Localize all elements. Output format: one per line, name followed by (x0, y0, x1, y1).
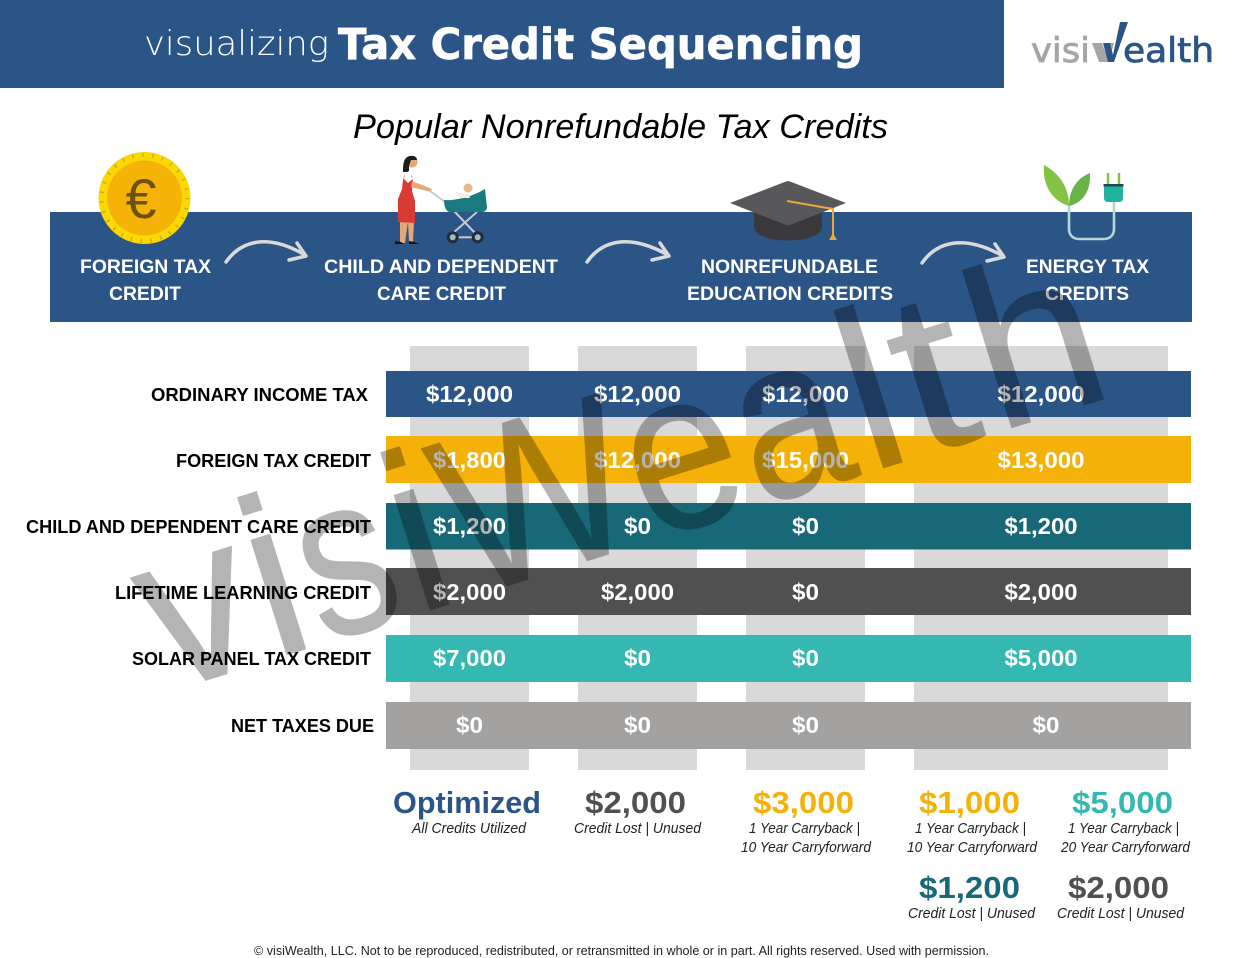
row: net taxes due: NET TAXES DUE (231, 716, 374, 736)
row: net taxes due: $0 (624, 712, 651, 738)
row: ordinary income tax: $12,000 (762, 381, 849, 407)
label: energy tax credits: ENERGY TAX (1026, 257, 1149, 278)
row: solar panel tax credit: $0 (792, 645, 819, 671)
row: solar panel tax credit (132, 635, 1191, 682)
outcome: $1,200 credit lost: $1,200 (919, 870, 1020, 905)
outcome: $1,200 credit lost: Credit Lost | Unused (908, 905, 1036, 922)
row: solar panel tax credit: $5,000 (1004, 645, 1078, 671)
row: child and dependent care credit: $0 (624, 513, 651, 539)
icon: euro coin (98, 152, 190, 244)
watermark: e (588, 312, 771, 588)
row: ordinary income tax (151, 371, 1191, 417)
watermark: h (935, 199, 1132, 479)
label: child and dependent care credit: CHILD AND DEPENDENT (324, 257, 558, 278)
watermark: v (104, 465, 283, 740)
logo: visiWealth: ealth (1123, 31, 1214, 71)
outcome: $2,000 credit lost, solar (1057, 870, 1185, 922)
row: net taxes due (231, 702, 1191, 749)
outcome: $1,000 carryover: 1 Year Carryback | (915, 820, 1026, 837)
row: ordinary income tax: $12,000 (426, 381, 513, 407)
row: net taxes due: $0 (456, 712, 483, 738)
title: Tax Credit Sequencing (338, 20, 863, 70)
row: lifetime learning credit: $2,000 (433, 579, 506, 605)
watermark: W (406, 346, 663, 645)
label: foreign tax credit: FOREIGN TAX (80, 257, 211, 278)
arrow: child care to education (587, 242, 669, 262)
outcome: $5,000 carryover: 1 Year Carryback | (1068, 820, 1179, 837)
row: solar panel tax credit: $0 (624, 645, 651, 671)
row: foreign tax credit: FOREIGN TAX CREDIT (176, 451, 371, 471)
watermark: l (807, 262, 932, 519)
outcome: $1,000 carryover: $1,000 (919, 785, 1020, 820)
watermark: t (858, 240, 1003, 504)
arrow: foreign to child care (226, 242, 306, 262)
outcome: $2,000 credit lost, solar: $2,000 (1068, 870, 1169, 905)
row: ordinary income tax: ORDINARY INCOME TAX (151, 385, 368, 405)
outcome: $3,000 carryover (741, 785, 872, 856)
row: net taxes due: $0 (1032, 712, 1060, 738)
row: lifetime learning credit: $2,000 (601, 579, 674, 605)
row: child and dependent care credit: $1,200 (1004, 513, 1078, 539)
watermark: i (211, 449, 335, 706)
row: solar panel tax credit: $7,000 (433, 645, 506, 671)
row: foreign tax credit: $1,800 (433, 447, 506, 473)
row: lifetime learning credit: $0 (792, 579, 819, 605)
label: nonrefundable education credits (687, 257, 893, 305)
icon: plant and plug (1044, 165, 1124, 239)
label: nonrefundable education credits: NONREFUNDABLE (701, 257, 878, 278)
row: net taxes due: $0 (792, 712, 819, 738)
watermark (104, 199, 1132, 740)
watermark: a (698, 279, 877, 554)
outcome: $3,000 carryover: 10 Year Carryforward (741, 839, 872, 856)
row: foreign tax credit: $13,000 (998, 447, 1084, 473)
row: child and dependent care credit: CHILD AND DEPENDENT CARE CREDIT (26, 517, 371, 537)
outcome: optimized: Optimized (393, 785, 541, 820)
outcome: $2,000 credit lost (574, 785, 702, 837)
outcome: $5,000 carryover (1060, 785, 1191, 856)
label: foreign tax credit (80, 257, 211, 305)
row: solar panel tax credit: SOLAR PANEL TAX CREDIT (132, 649, 371, 669)
row: foreign tax credit (176, 436, 1191, 483)
outcome: $5,000 carryover: $5,000 (1072, 785, 1173, 820)
subtitle: Popular Nonrefundable Tax Credits (353, 108, 888, 146)
outcome: $5,000 carryover: 20 Year Carryforward (1060, 839, 1191, 856)
label: child and dependent care credit (324, 257, 558, 305)
label: child and dependent care credit: CARE CREDIT (377, 284, 506, 305)
row: lifetime learning credit: LIFETIME LEARNING CREDIT (115, 583, 371, 603)
row: foreign tax credit: $12,000 (594, 447, 681, 473)
row: ordinary income tax: $12,000 (998, 381, 1084, 407)
row: ordinary income tax: $12,000 (594, 381, 681, 407)
icon: graduation cap (730, 181, 846, 240)
label: nonrefundable education credits: EDUCATION CREDITS (687, 284, 893, 305)
title: visualizing (144, 24, 329, 64)
outcome: $1,200 credit lost (908, 870, 1036, 922)
panel: credit sequence band (50, 212, 1192, 322)
outcome: $2,000 credit lost: Credit Lost | Unused (574, 820, 702, 837)
row: lifetime learning credit: $2,000 (1004, 579, 1078, 605)
row: lifetime learning credit (115, 568, 1191, 615)
outcome: $1,000 carryover: 10 Year Carryforward (907, 839, 1038, 856)
outcome: $2,000 credit lost: $2,000 (585, 785, 686, 820)
outcome: $3,000 carryover: $3,000 (753, 785, 854, 820)
watermark: s (262, 421, 425, 691)
row: foreign tax credit: $15,000 (762, 447, 849, 473)
row: child and dependent care credit (26, 503, 1191, 550)
outcome: optimized: All Credits Utilized (411, 820, 527, 837)
label: energy tax credits: CREDITS (1045, 284, 1129, 305)
label: energy tax credits (1026, 257, 1149, 305)
icon: euro coin: € (125, 167, 157, 230)
outcome: $2,000 credit lost, solar: Credit Lost | Unused (1057, 905, 1185, 922)
outcome: $3,000 carryover: 1 Year Carryback | (749, 820, 860, 837)
copyright footer: © visiWealth, LLC. Not to be reproduced, redistributed, or retransmitted in whole or in part. All rights reserved. Used with permission. (254, 943, 989, 958)
outcome: optimized (393, 785, 541, 837)
header banner (0, 0, 1004, 88)
label: foreign tax credit: CREDIT (109, 284, 181, 305)
logo: visiWealth: visi (1031, 31, 1090, 71)
icon: woman with stroller (395, 156, 487, 244)
watermark: i (354, 404, 478, 662)
panel: scenario columns (410, 346, 1168, 770)
outcome: $1,000 carryover (907, 785, 1038, 856)
arrow: education to energy (922, 243, 1004, 263)
row: child and dependent care credit: $1,200 (433, 513, 506, 539)
row: child and dependent care credit: $0 (792, 513, 819, 539)
logo: visiWealth (1031, 22, 1214, 71)
